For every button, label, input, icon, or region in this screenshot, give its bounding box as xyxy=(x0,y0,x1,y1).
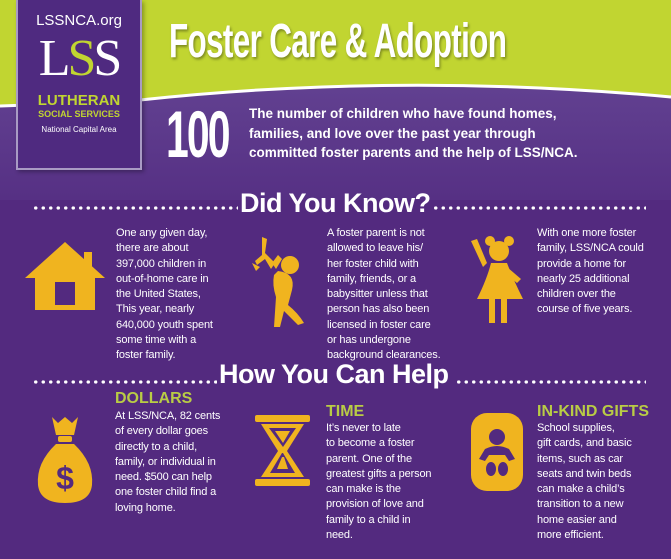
icon: money bag xyxy=(38,417,92,503)
icon: adult lifting child xyxy=(252,237,304,327)
stat text: families, and love over the past year through xyxy=(249,126,536,140)
text: fact 3: provide a home for xyxy=(537,258,626,270)
background header xyxy=(0,0,671,186)
panel: dollars: of every dollar goes xyxy=(115,425,208,437)
logo box: LSS xyxy=(39,30,119,87)
panel: dollars: need. $500 can help xyxy=(115,471,212,483)
text: fact 1: out-of-home care in xyxy=(116,273,209,285)
text: fact 1 xyxy=(116,227,213,361)
panel: time xyxy=(326,403,431,541)
text: fact 2: her foster child with xyxy=(327,258,419,270)
panel: in-kind gifts: items, such as car xyxy=(537,453,623,465)
stat text: committed foster parents and the help of LSS/NCA. xyxy=(249,145,578,160)
panel: in-kind gifts: transition to a new xyxy=(537,498,623,510)
text: fact 3: family, LSS/NCA could xyxy=(537,242,644,254)
text: fact 1: One any given day, xyxy=(116,227,207,239)
panel: in-kind gifts xyxy=(537,403,649,541)
text: fact 1: some time with a xyxy=(116,334,196,346)
text: fact 2: person has also been xyxy=(327,303,429,315)
stat text: The number of children who have found homes, xyxy=(249,106,557,121)
panel: time: family to a child in xyxy=(326,514,410,526)
panel: dollars: directly to a child, xyxy=(115,441,197,453)
text: fact 2 xyxy=(327,227,440,361)
panel: dollars xyxy=(115,390,220,514)
logo box: LUTHERAN xyxy=(38,92,120,109)
text: fact 3 xyxy=(537,227,644,315)
icon: girl waving xyxy=(471,236,523,323)
panel: time: can make is the xyxy=(326,483,401,495)
text: fact 3: course of five years. xyxy=(537,303,632,315)
panel: time: need. xyxy=(326,529,353,541)
panel: time: TIME xyxy=(326,403,364,420)
panel: in-kind gifts: more efficient. xyxy=(537,529,604,541)
panel: time: provision of love and xyxy=(326,498,424,510)
text: fact 1: there are about xyxy=(116,242,188,254)
panel: time: to become a foster xyxy=(326,437,414,449)
text: fact 2: allowed to leave his/ xyxy=(327,242,423,254)
text: fact 1: 397,000 children in xyxy=(116,258,206,270)
logo box xyxy=(16,0,142,170)
text: fact 3: With one more foster xyxy=(537,227,636,239)
panel: dollars: At LSS/NCA, 82 cents xyxy=(115,410,220,422)
text: fact 2: licensed in foster care xyxy=(327,319,431,331)
heading: did you know: Did You Know? xyxy=(240,188,430,218)
panel: in-kind gifts: IN-KIND GIFTS xyxy=(537,403,649,420)
text: fact 1: This year, nearly xyxy=(116,303,194,315)
text: fact 1: the United States, xyxy=(116,288,201,300)
text: fact 2: background clearances. xyxy=(327,349,440,361)
text: fact 1: 640,000 youth spent xyxy=(116,319,213,331)
panel: dollars: loving home. xyxy=(115,502,176,514)
icon: hourglass xyxy=(255,415,310,486)
stat text xyxy=(249,106,578,160)
text: fact 1: foster family. xyxy=(116,349,175,361)
text: fact 3: nearly 25 additional xyxy=(537,273,629,285)
panel: in-kind gifts: seats and twin beds xyxy=(537,468,631,480)
text: fact 2: A foster parent is not xyxy=(327,227,425,239)
title: Foster Care & Adoption xyxy=(169,15,506,68)
panel: dollars: DOLLARS xyxy=(115,390,192,407)
panel: in-kind gifts: School supplies, xyxy=(537,422,615,434)
text: fact 2: or has undergone xyxy=(327,334,411,346)
heading: how you can help: How You Can Help xyxy=(219,359,449,389)
text: fact 2: family, friends, or a xyxy=(327,273,416,285)
stat: 100: 100 xyxy=(166,97,229,171)
panel: time: It’s never to late xyxy=(326,422,401,434)
panel: dollars: one foster child find a xyxy=(115,486,216,498)
icon: money bag: $ xyxy=(56,460,74,496)
panel: in-kind gifts: gift cards, and basic xyxy=(537,437,632,449)
panel: dollars: family, or individual in xyxy=(115,456,216,468)
panel: in-kind gifts: can make a child’s xyxy=(537,483,625,495)
panel: time: parent. One of the xyxy=(326,453,412,465)
panel: in-kind gifts: home easier and xyxy=(537,514,617,526)
logo box: National Capital Area xyxy=(41,125,117,134)
text: fact 2: babysitter unless that xyxy=(327,288,428,300)
icon: car seat xyxy=(471,413,523,491)
panel: time: greatest gifts a person xyxy=(326,468,431,480)
icon: house xyxy=(25,242,105,310)
logo box: LSSNCA.org xyxy=(36,12,122,29)
text: fact 3: children over the xyxy=(537,288,616,300)
logo box: SOCIAL SERVICES xyxy=(38,109,120,119)
